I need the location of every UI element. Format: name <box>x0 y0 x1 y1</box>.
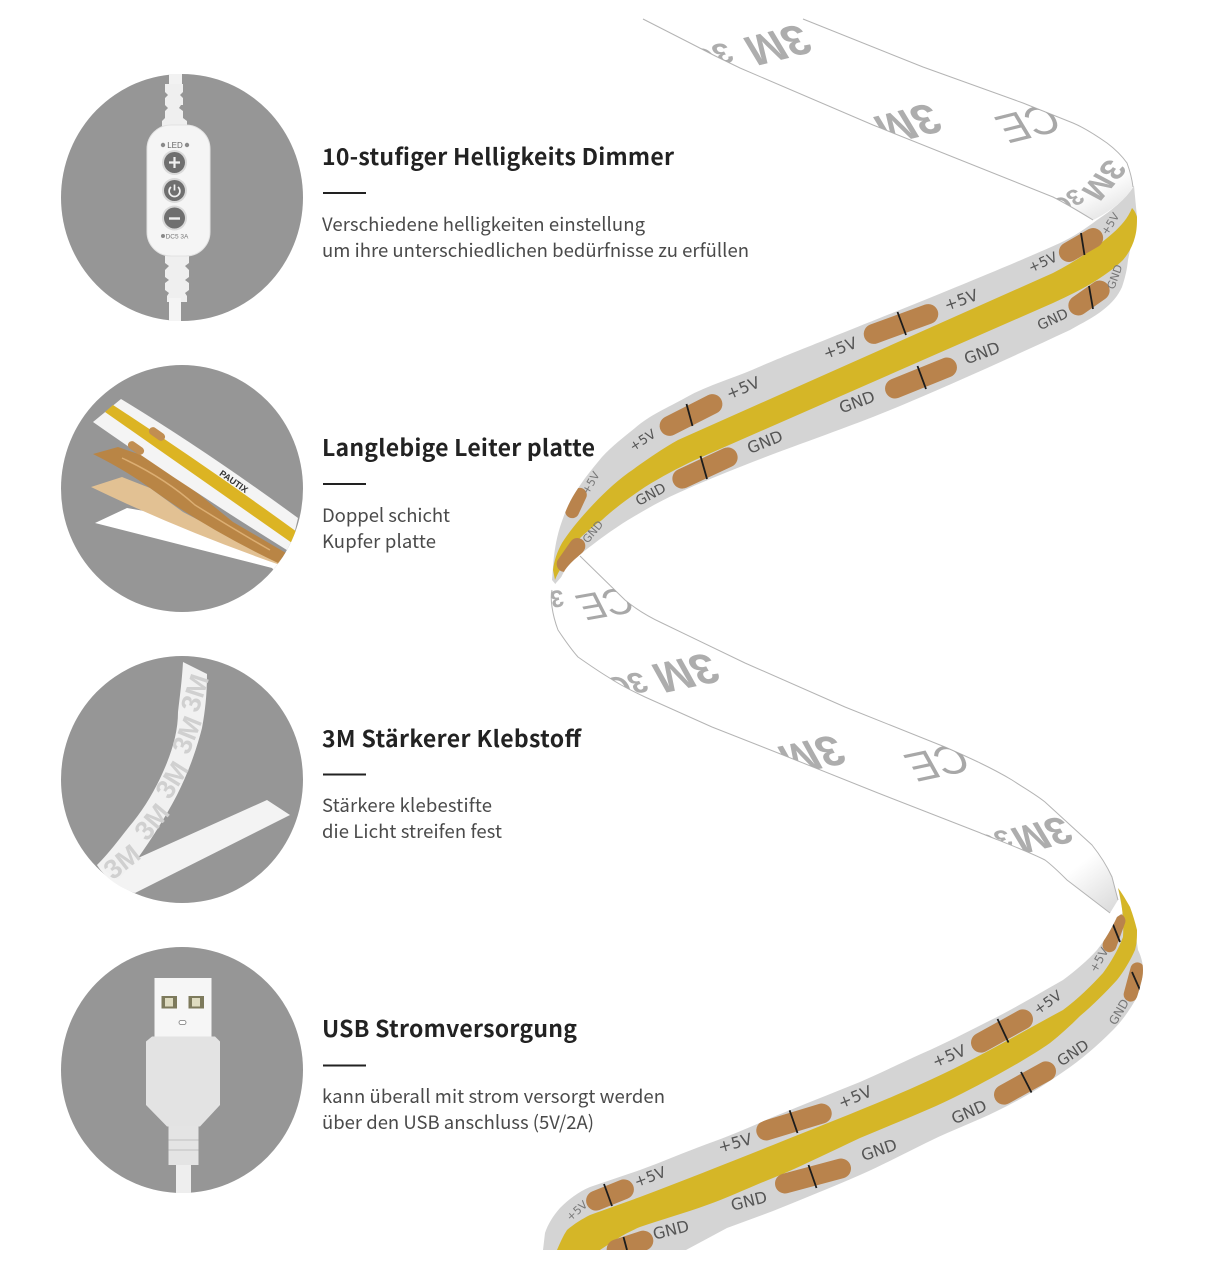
description <box>322 211 749 263</box>
adhesive print: 3M <box>175 671 215 715</box>
strip labels: GND <box>948 1096 990 1128</box>
brand label: PAUTIX <box>218 468 250 495</box>
panel: adhesive feature <box>61 656 582 903</box>
copper pads <box>554 224 1114 575</box>
strip labels: +5V <box>716 1129 754 1157</box>
strip labels <box>579 210 1125 546</box>
strip labels: GND <box>859 1135 899 1165</box>
led strip lower: adhesive back: 3M <box>1003 808 1081 862</box>
led strip lower: adhesive back: 3M <box>769 726 855 784</box>
strip labels: GND <box>744 426 786 458</box>
button: minus <box>162 206 187 230</box>
strip labels <box>564 945 1132 1244</box>
strip labels: GND <box>1106 997 1132 1027</box>
led strip lower: front <box>543 888 1146 1262</box>
led strip upper: front <box>552 186 1137 586</box>
description: Verschiedene helligkeiten einstellung <box>322 211 646 237</box>
description: um ihre unterschiedlichen bedürfnisse zu erfüllen <box>322 237 749 263</box>
adhesive print: 3M <box>149 756 195 804</box>
led strip upper: adhesive back: 3C <box>684 36 740 76</box>
strip labels: +5V <box>929 1041 969 1071</box>
adhesive print: 3M <box>128 798 176 846</box>
strip labels: +5V <box>835 1082 875 1112</box>
strip labels: GND <box>1035 306 1071 334</box>
icon: 3M tape <box>61 656 303 903</box>
strip labels: +5V <box>821 333 860 363</box>
strip labels: +5V <box>942 285 980 315</box>
strip labels: +5V <box>1026 249 1060 276</box>
led label: LED <box>167 141 183 150</box>
icon: layered circuit board <box>61 365 303 612</box>
description <box>322 792 502 844</box>
pads <box>126 426 167 456</box>
strip labels: GND <box>729 1187 769 1215</box>
led emitter band <box>557 888 1137 1250</box>
icon: inline dimmer controller <box>61 70 303 322</box>
led strip upper: adhesive back: 3M <box>865 94 951 154</box>
icon: usb plug <box>61 947 303 1193</box>
strip labels: +5V <box>1086 945 1112 975</box>
strip labels: GND <box>633 480 669 510</box>
dc label: DC5 3A <box>166 234 189 240</box>
strip labels: +5V <box>632 1163 669 1191</box>
description <box>322 502 450 554</box>
strip labels: GND <box>580 518 606 546</box>
led strip lower: adhesive back: 3C <box>970 824 1018 858</box>
button: power <box>162 178 187 203</box>
adhesive print <box>98 671 215 885</box>
strip labels: GND <box>837 387 877 417</box>
led strip upper: adhesive back: CE <box>987 95 1069 151</box>
heading: USB Stromversorgung <box>322 1010 577 1044</box>
strip labels: GND <box>651 1216 691 1244</box>
panel: usb feature <box>61 947 665 1193</box>
description: Doppel schicht <box>322 502 450 528</box>
description: die Licht streifen fest <box>322 818 502 844</box>
panel: circuit board feature <box>61 365 595 612</box>
strip labels: +5V <box>723 373 763 403</box>
copper pads <box>583 912 1146 1262</box>
strip labels: +5V <box>1099 210 1123 238</box>
strip labels: GND <box>1054 1036 1092 1070</box>
led emitter band <box>553 208 1137 580</box>
strip labels: +5V <box>579 469 603 497</box>
led strip upper: adhesive back: 3C <box>1045 183 1089 219</box>
description: Kupfer platte <box>322 528 436 554</box>
led strip lower: adhesive back <box>548 556 1118 913</box>
led strip lower: adhesive back: CE <box>569 579 641 627</box>
led strip upper: adhesive back: 3M <box>1074 154 1134 206</box>
white bottom mask <box>530 1250 830 1283</box>
heading: 3M Stärkerer Klebstoff <box>322 720 582 754</box>
heading: 10-stufiger Helligkeits Dimmer <box>322 138 675 172</box>
description: über den USB anschluss (5V/2A) <box>322 1109 594 1135</box>
led label <box>161 141 189 150</box>
led strip lower: adhesive back: 3C <box>600 665 654 705</box>
led strip lower: adhesive back: 3 <box>548 584 566 612</box>
strip labels: +5V <box>1031 988 1065 1018</box>
led strip upper: adhesive back <box>643 15 1134 220</box>
description: kann überall mit strom versorgt werden <box>322 1083 665 1109</box>
heading: Langlebige Leiter platte <box>322 429 595 463</box>
led strip upper: adhesive back: 3M <box>735 15 821 75</box>
description <box>322 1083 665 1135</box>
strip labels: +5V <box>564 1198 591 1224</box>
adhesive print: 3M <box>98 839 146 885</box>
panel: dimmer feature <box>61 70 749 322</box>
led strip lower: adhesive back: 3M <box>643 644 729 702</box>
button: plus <box>162 150 187 175</box>
strip labels: GND <box>1105 263 1125 291</box>
strip labels: GND <box>962 338 1002 368</box>
strip labels: +5V <box>627 427 659 455</box>
adhesive print: 3M <box>166 712 208 758</box>
description: Stärkere klebestifte <box>322 792 492 818</box>
led strip lower: adhesive back: CE <box>897 734 977 790</box>
